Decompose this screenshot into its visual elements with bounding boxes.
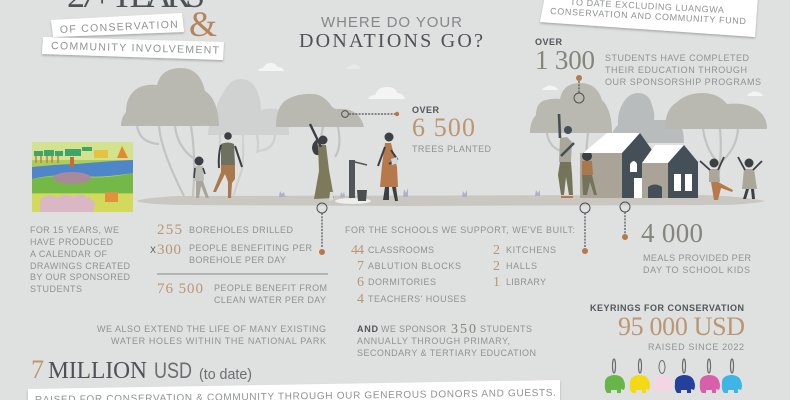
stat: schools built: 2 (493, 243, 500, 258)
stat: students completed: 1 300 (535, 45, 595, 75)
stat: schools built: 4 (357, 292, 364, 307)
stat: schools built: LIBRARY (506, 277, 546, 287)
connector: students (574, 75, 584, 103)
text: sponsored students: 350 (451, 322, 476, 337)
stat: schools built: 7 (357, 259, 364, 274)
stat: boreholes calculation: 255 (157, 222, 182, 238)
people: adult and child (194, 132, 242, 198)
text: sponsored students: STUDENTS (480, 324, 532, 334)
stat: students completed: STUDENTS HAVE COMPLETED (605, 53, 750, 63)
stat: 7 million usd: (to date) (199, 366, 252, 383)
stat: 7 million usd: USD (154, 358, 192, 383)
stat: students completed: OVER (535, 37, 562, 47)
stat: students completed: OUR SPONSORSHIP PROGRAMS (605, 77, 761, 87)
stat: schools built: DORMITORIES (368, 277, 436, 287)
stat: trees planted: TREES PLANTED (412, 144, 492, 154)
stat: 7 million usd: MILLION (48, 358, 147, 384)
people: man and woman near houses (558, 114, 592, 198)
stat: boreholes calculation: BOREHOLE PER DAY (189, 255, 286, 265)
text: sponsored students: SECONDARY & TERTIARY EDUCATION (357, 348, 536, 358)
stat: schools built: 6 (357, 275, 364, 290)
top right note strip: CONSERVATION AND COMMUNITY FUND (550, 6, 747, 26)
stat: schools built: TEACHERS' HOUSES (368, 294, 466, 304)
text: calendar of drawings: STUDENTS (30, 284, 82, 294)
painting: children's calendar drawing (32, 142, 133, 212)
text: sponsored students (357, 322, 536, 358)
connector: water (317, 203, 327, 255)
stat: students completed (535, 37, 761, 87)
stat: schools built (345, 225, 575, 307)
stat: meals: MEALS PROVIDED PER (643, 253, 752, 263)
stat: meals: 4 000 (641, 218, 703, 248)
stat: schools built: CLASSROOMS (368, 245, 434, 255)
stat: 7 million usd (31, 355, 252, 384)
stat: boreholes calculation: PEOPLE BENEFITING PER (189, 243, 312, 253)
trees left group (121, 68, 364, 197)
connector: schools (580, 203, 590, 254)
stat: boreholes calculation: PEOPLE BENEFIT FROM (214, 283, 327, 293)
trees right group (530, 83, 767, 194)
stat: schools built: 44 (351, 243, 364, 258)
people: dancing children (700, 157, 762, 200)
stat: 7 million usd: 7 (31, 355, 44, 384)
stat: meals: DAY TO SCHOOL KIDS (643, 265, 750, 275)
stat: boreholes calculation: BOREHOLES DRILLED (189, 225, 294, 235)
icons: elephant keyrings (605, 359, 742, 393)
connector: trees (342, 111, 399, 117)
stat: boreholes calculation: 76 500 (157, 281, 203, 297)
heading: where do your donations go: DONATIONS GO? (299, 30, 483, 52)
stat: keyrings: RAISED SINCE 2022 (648, 342, 744, 352)
text: water holes: WATER HOLES WITHIN THE NATIONAL PARK (111, 336, 326, 346)
stat: meals (641, 218, 752, 275)
stat: schools built: ABLUTION BLOCKS (368, 261, 461, 271)
stat: schools built: KITCHENS (506, 245, 556, 255)
stat: trees planted: 6 500 (412, 113, 475, 142)
plants (279, 188, 636, 198)
title: years of conservation: OF CONSERVATION (60, 19, 178, 36)
stat: keyrings (590, 303, 745, 352)
text: calendar of drawings: BY OUR SPONSORED (30, 272, 130, 282)
text: sponsored students: AND (357, 324, 378, 334)
stat: keyrings: KEYRINGS FOR CONSERVATION (590, 303, 744, 313)
ground (137, 195, 765, 206)
stat: boreholes calculation (150, 222, 328, 305)
stat: students completed: THEIR EDUCATION THROUGH (605, 65, 747, 75)
people: women at water pump (310, 124, 398, 204)
stat: schools built: HALLS (506, 261, 537, 271)
heading: where do your donations go: WHERE DO YOUR (321, 14, 462, 31)
text: calendar of drawings: A CALENDAR OF (30, 249, 108, 259)
text: calendar of drawings: FOR 15 YEARS, WE (30, 225, 119, 235)
stat: boreholes calculation: X (150, 245, 156, 255)
text: calendar of drawings (30, 225, 130, 294)
title: years of conservation (42, 0, 224, 60)
title: years of conservation: COMMUNITY INVOLVEMENT (51, 40, 220, 57)
text: calendar of drawings: HAVE PRODUCED (30, 237, 114, 247)
text: sponsored students: WE SPONSOR (381, 324, 446, 334)
stat: trees planted: OVER (412, 105, 440, 115)
connector: meals (620, 202, 630, 240)
stat: boreholes calculation: 300 (157, 242, 181, 258)
bottom strip: raised for conservation (28, 380, 560, 400)
stat: keyrings: 95 000 USD (618, 312, 745, 341)
title: years of conservation: & (189, 4, 217, 44)
text: sponsored students: ANNUALLY THROUGH PRIMARY, (357, 336, 510, 346)
clouds (258, 63, 763, 99)
text: calendar of drawings: DRAWINGS CREATED (30, 261, 130, 271)
heading: where do your donations go (299, 14, 483, 52)
houses (580, 133, 698, 198)
stat: boreholes calculation: CLEAN WATER PER DAY (214, 295, 326, 305)
text: water holes: WE ALSO EXTEND THE LIFE OF MANY EXISTING (97, 324, 326, 334)
top right note strip (540, 0, 758, 37)
stat: schools built: 2 (493, 259, 500, 274)
stat: schools built: FOR THE SCHOOLS WE SUPPORT, WE'VE BUILT: (345, 225, 575, 235)
stat: schools built: 1 (493, 275, 500, 290)
stat: trees planted (412, 105, 492, 154)
text: water holes (97, 324, 326, 346)
